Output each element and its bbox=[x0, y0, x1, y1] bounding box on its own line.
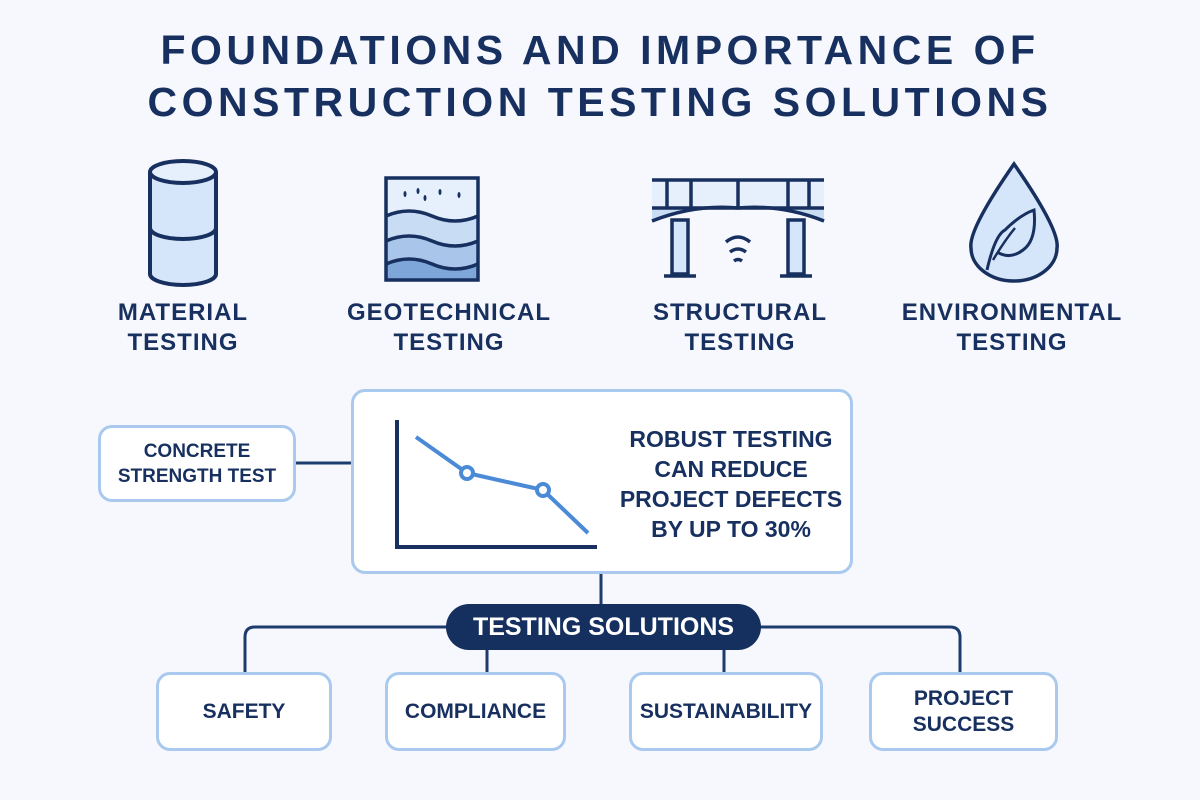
label: structural testing: STRUCTURAL bbox=[653, 299, 827, 326]
stat text: ROBUST TESTING bbox=[629, 426, 833, 452]
callout: concrete strength test bbox=[98, 425, 296, 502]
callout: concrete strength test: STRENGTH TEST bbox=[118, 466, 276, 486]
box: sustainability bbox=[629, 672, 823, 751]
label: geotechnical testing bbox=[347, 299, 551, 356]
box: safety bbox=[156, 672, 332, 751]
stat text: PROJECT DEFECTS bbox=[620, 486, 842, 512]
icon: soil layers bbox=[384, 176, 480, 282]
label: environmental testing: TESTING bbox=[956, 329, 1068, 356]
label: structural testing: TESTING bbox=[684, 329, 796, 356]
label: material testing: TESTING bbox=[127, 329, 238, 356]
box: compliance: COMPLIANCE bbox=[405, 700, 546, 722]
icon: cylinder bbox=[148, 159, 218, 287]
line chart bbox=[395, 420, 597, 549]
box: sustainability: SUSTAINABILITY bbox=[640, 700, 812, 722]
icon: bridge bbox=[651, 178, 825, 278]
label: geotechnical testing: TESTING bbox=[393, 329, 504, 356]
stat text bbox=[620, 426, 842, 542]
hub: testing solutions: TESTING SOLUTIONS bbox=[473, 613, 734, 641]
label: environmental testing: ENVIRONMENTAL bbox=[902, 299, 1122, 326]
title: CONSTRUCTION TESTING SOLUTIONS bbox=[148, 79, 1052, 125]
label: material testing: MATERIAL bbox=[118, 299, 248, 326]
label: material testing bbox=[118, 299, 248, 356]
panel: defect reduction bbox=[351, 389, 853, 574]
stat text: CAN REDUCE bbox=[654, 456, 808, 482]
label: environmental testing bbox=[902, 299, 1122, 356]
label: geotechnical testing: GEOTECHNICAL bbox=[347, 299, 551, 326]
box: compliance bbox=[385, 672, 566, 751]
icon: drop with leaf bbox=[969, 161, 1059, 283]
title bbox=[148, 27, 1052, 125]
box: project success: PROJECT bbox=[914, 686, 1013, 710]
box: project success bbox=[869, 672, 1058, 751]
stat text: BY UP TO 30% bbox=[651, 516, 811, 542]
label: structural testing bbox=[653, 299, 827, 356]
hub: testing solutions bbox=[446, 604, 761, 650]
box: project success: SUCCESS bbox=[913, 712, 1014, 736]
callout: concrete strength test: CONCRETE bbox=[144, 440, 250, 462]
box: safety: SAFETY bbox=[203, 700, 285, 722]
title: FOUNDATIONS AND IMPORTANCE OF bbox=[160, 27, 1040, 73]
